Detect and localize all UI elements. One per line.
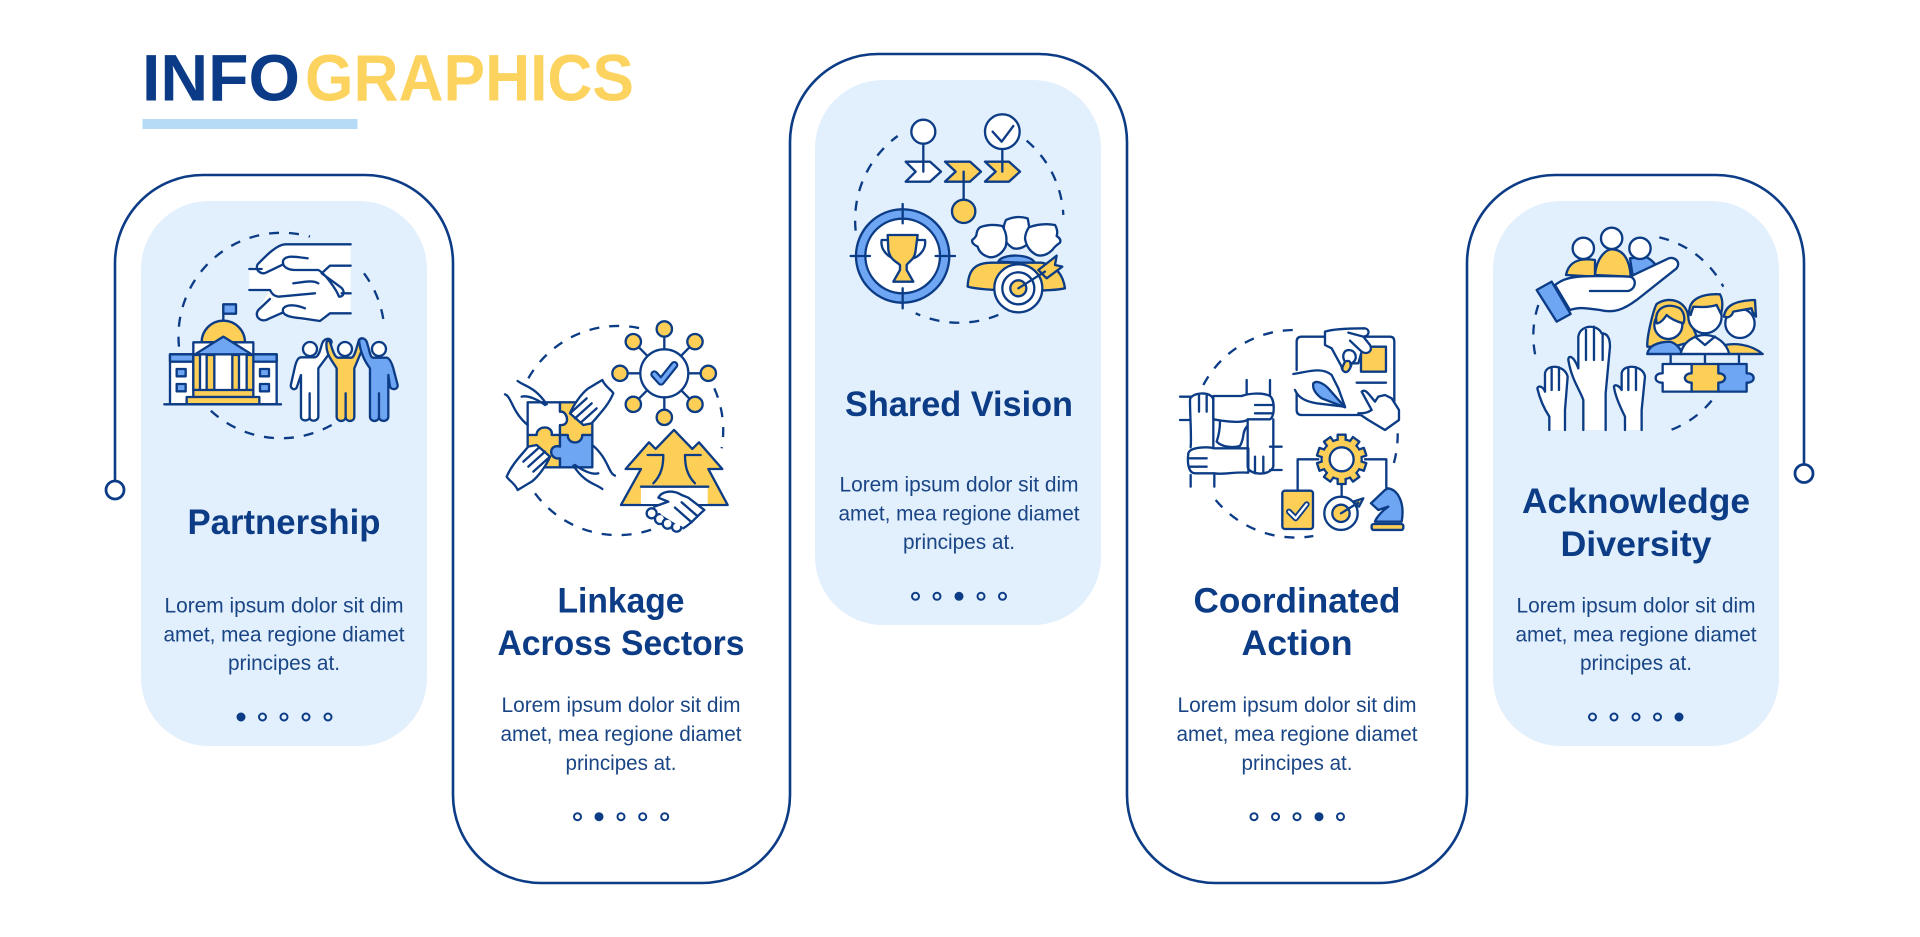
- body text: Lorem ipsum dolor sit dim: [1178, 694, 1416, 717]
- pagination dots: [1589, 714, 1682, 720]
- panel: coordinated action: [1176, 328, 1418, 820]
- panel: linkage across sectors: [498, 321, 744, 820]
- panel: partnership: [164, 233, 405, 720]
- panel fill: shared vision: [815, 80, 1101, 625]
- pagination dots: [574, 813, 668, 820]
- body text: Lorem ipsum dolor sit dim: [1516, 595, 1756, 618]
- heading: linkage across sectors: [498, 582, 744, 663]
- body text: principes at.: [903, 531, 1015, 554]
- body text: amet, mea regione diamet: [164, 624, 405, 647]
- heading: linkage across sectors: Linkage: [558, 582, 684, 621]
- body text: [838, 474, 1080, 554]
- title: INFO: [142, 41, 300, 115]
- body text: amet, mea regione diamet: [1516, 624, 1757, 647]
- icon: hands, government building and people: [164, 233, 398, 438]
- body text: Lorem ipsum dolor sit dim: [840, 474, 1078, 496]
- body text: amet, mea regione diamet: [1176, 723, 1418, 746]
- heading: coordinated action: [1194, 582, 1400, 663]
- body text: amet, mea regione diamet: [838, 502, 1080, 526]
- title underline bar: [142, 119, 358, 129]
- body text: principes at.: [1242, 752, 1352, 775]
- connecting outline: [106, 54, 1813, 883]
- body text: [1176, 694, 1418, 775]
- panel: acknowledge diversity: [1516, 228, 1763, 720]
- panel fill: acknowledge diversity: [1493, 201, 1779, 746]
- icon: puzzle, network and handshake: [505, 321, 728, 535]
- panel: shared vision: [838, 114, 1080, 600]
- body text: Lorem ipsum dolor sit dim: [164, 595, 404, 618]
- heading: shared vision: Shared Vision: [845, 385, 1073, 424]
- body text: [500, 694, 742, 775]
- pagination dots: [238, 714, 332, 720]
- heading: linkage across sectors: Across Sectors: [498, 624, 744, 663]
- panel fill: partnership: [141, 201, 427, 746]
- body text: principes at.: [228, 652, 340, 675]
- heading: coordinated action: Coordinated: [1194, 582, 1400, 621]
- body text: Lorem ipsum dolor sit dim: [502, 694, 740, 717]
- heading: acknowledge diversity: Acknowledge: [1522, 482, 1750, 521]
- body text: [164, 595, 405, 675]
- body text: principes at.: [1580, 652, 1692, 675]
- heading: partnership: Partnership: [188, 503, 380, 542]
- title: GRAPHICS: [305, 41, 634, 115]
- icon: joined hands, document and gear: [1180, 328, 1403, 538]
- pagination dots: [912, 593, 1006, 600]
- heading: coordinated action: Action: [1242, 624, 1352, 663]
- pagination dots: [1250, 813, 1344, 820]
- body text: principes at.: [566, 752, 676, 775]
- icon: milestones, trophy target and team: [851, 114, 1065, 323]
- body text: amet, mea regione diamet: [500, 723, 742, 746]
- heading: acknowledge diversity: Diversity: [1560, 525, 1712, 564]
- title: [142, 41, 634, 115]
- heading: acknowledge diversity: [1522, 482, 1750, 564]
- icon: hand with people, raised hands and team puzzle: [1533, 228, 1763, 433]
- body text: [1516, 595, 1757, 675]
